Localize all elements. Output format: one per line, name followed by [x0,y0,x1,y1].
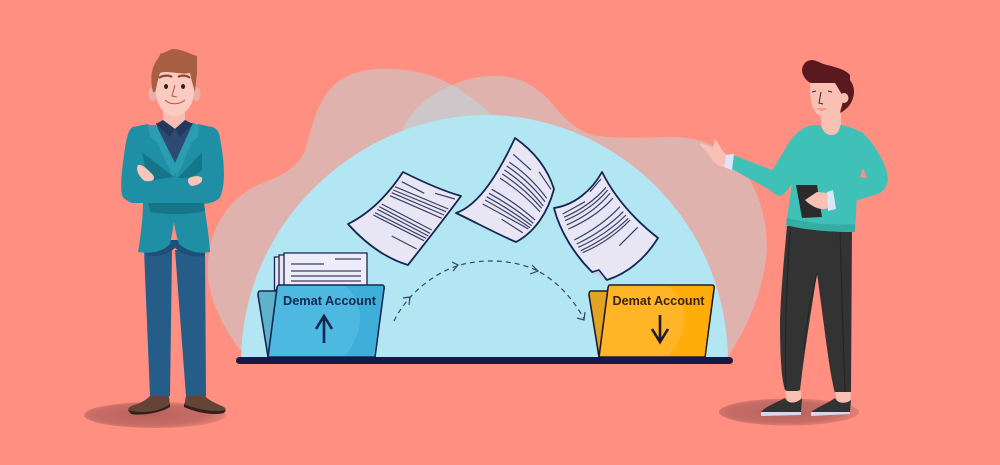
folder label: Demat Account [612,294,705,308]
up arrow [316,316,332,343]
pointing hand [700,139,726,167]
trouser seams [785,232,845,392]
ankles [785,391,851,406]
documents in folder [274,253,367,290]
neck [163,110,185,129]
flying document 2 [456,138,554,242]
trousers [144,250,206,396]
sweater hem [786,218,855,232]
face details [812,91,832,104]
inner trouser gap [146,240,205,257]
left cuff [724,154,734,170]
collar [156,120,193,137]
dashed transfer arc [394,261,585,321]
right shoe [811,398,851,412]
base bar [236,357,733,364]
shoe soles [761,412,850,416]
arrowheads [403,262,585,320]
eyebrows [159,76,190,78]
hair [802,60,854,113]
folder back flap [589,291,610,357]
shadow under left man [84,402,226,428]
left hand [137,165,154,181]
left shoe [761,398,802,412]
left man [121,49,226,415]
right cuff [827,190,836,211]
right hand [188,176,202,186]
shirt [156,123,193,166]
down arrow [652,315,668,342]
folder front [268,285,384,357]
shadow under right man [719,398,859,426]
eyes [164,84,185,89]
left folder [258,253,384,357]
ears [148,87,158,101]
gap between arm and body [860,168,867,178]
neck [821,110,841,137]
right folder [589,285,714,357]
flying document 3 [554,172,658,280]
left shoes [128,396,226,414]
mouth [817,108,827,111]
right lapel [174,123,199,177]
jacket shadow under arms [148,203,205,214]
hair [151,49,197,92]
shoe soles [128,404,226,415]
right man [700,60,888,416]
dark inner jacket right [178,152,202,178]
trousers [780,226,852,393]
background blob left [208,69,520,358]
crossed forearm [123,178,192,203]
face [156,68,194,116]
glass dome [241,115,728,358]
jacket [121,124,224,253]
dark inner jacket left [142,152,174,181]
folder label: Demat Account [283,294,377,308]
ear [840,93,848,103]
tablet [796,185,822,218]
folder back flap [258,291,277,357]
sweater body and pointing arm [732,125,862,232]
folder darker corner [345,286,383,356]
holding arm [835,125,888,207]
background blob right [403,76,767,358]
left lapel [148,125,176,177]
flying document 1 [348,172,461,265]
holding hand [805,192,828,209]
nose and smile [165,85,185,104]
folder front [599,285,714,357]
folder darker corner [668,286,713,356]
face [810,82,842,119]
